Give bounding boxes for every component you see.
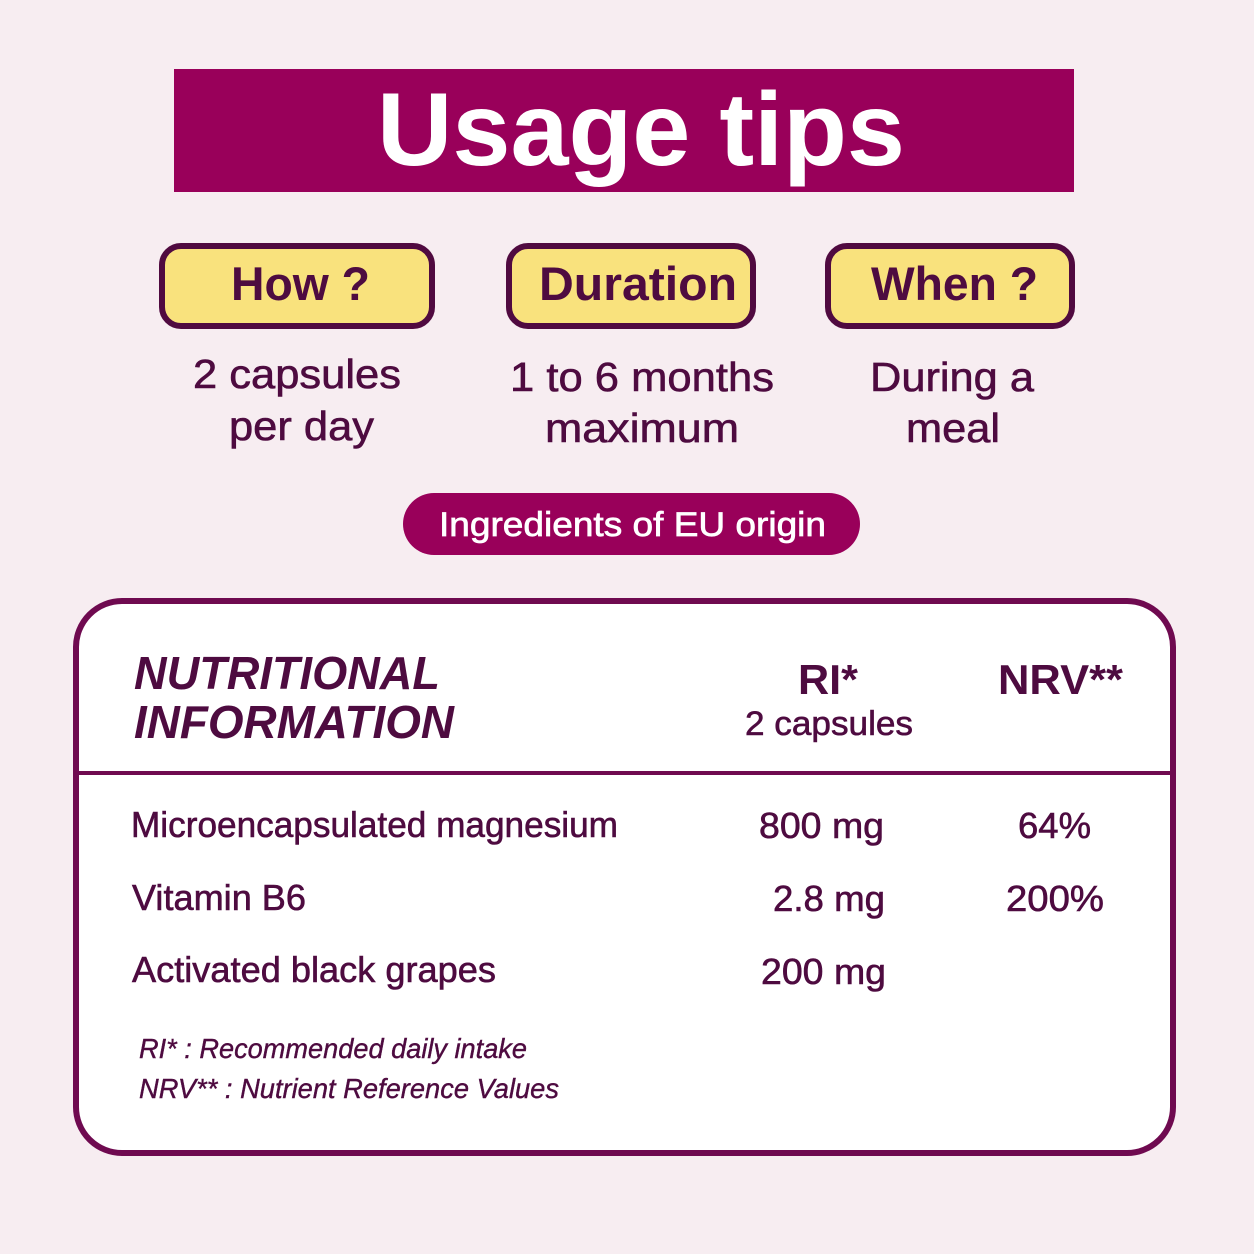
heading: how: How ? — [231, 257, 370, 310]
panel: duration — [509, 246, 774, 451]
header divider — [79, 771, 1170, 775]
column heading: RI — [745, 656, 913, 743]
row: vitamin B6: 2.8 mg — [773, 878, 885, 919]
text: duration detail: 1 to 6 months — [510, 354, 774, 400]
row: magnesium: Microencapsulated magnesium — [131, 804, 618, 845]
row: vitamin B6: 200% — [1006, 878, 1104, 919]
row: magnesium: 64% — [1018, 805, 1091, 846]
row: magnesium — [131, 804, 1091, 846]
text: when detail — [870, 354, 1034, 451]
badge: how — [162, 246, 432, 326]
footnotes: NRV** : Nutrient Reference Values — [139, 1073, 559, 1104]
text: how detail — [193, 351, 401, 449]
column heading: RI: RI* — [798, 656, 859, 703]
column heading: NRV: NRV** — [998, 656, 1124, 703]
text: how detail: 2 capsules — [193, 351, 401, 397]
footnotes: RI* : Recommended daily intake — [139, 1033, 527, 1064]
origin pill — [403, 493, 860, 555]
row: black grapes: Activated black grapes — [132, 949, 496, 990]
row: vitamin B6: Vitamin B6 — [132, 877, 306, 918]
row: black grapes: 200 mg — [761, 951, 886, 992]
text: how detail: per day — [229, 403, 375, 449]
panel: how — [162, 246, 432, 449]
heading: duration: Duration — [539, 257, 737, 310]
title banner — [174, 69, 1074, 192]
panel: nutritional information — [76, 601, 1173, 1153]
text: duration detail — [510, 354, 774, 451]
text: when detail: During a — [870, 354, 1034, 400]
row: magnesium: 800 mg — [759, 805, 884, 846]
table heading: NUTRITIONAL — [134, 647, 440, 699]
text: duration detail: maximum — [545, 405, 739, 451]
text: when detail: meal — [906, 405, 1000, 451]
footnotes — [139, 1033, 559, 1104]
origin pill: Ingredients of EU origin — [439, 506, 826, 544]
table heading — [134, 647, 455, 748]
badge: when — [828, 246, 1072, 326]
title: Usage tips — [377, 72, 905, 188]
row: black grapes — [132, 949, 886, 992]
row: vitamin B6 — [132, 877, 1104, 919]
table heading: INFORMATION — [134, 696, 455, 748]
panel: when — [828, 246, 1072, 451]
column heading: RI: 2 capsules — [745, 705, 913, 743]
heading: when: When ? — [871, 257, 1038, 310]
badge: duration — [509, 246, 753, 326]
